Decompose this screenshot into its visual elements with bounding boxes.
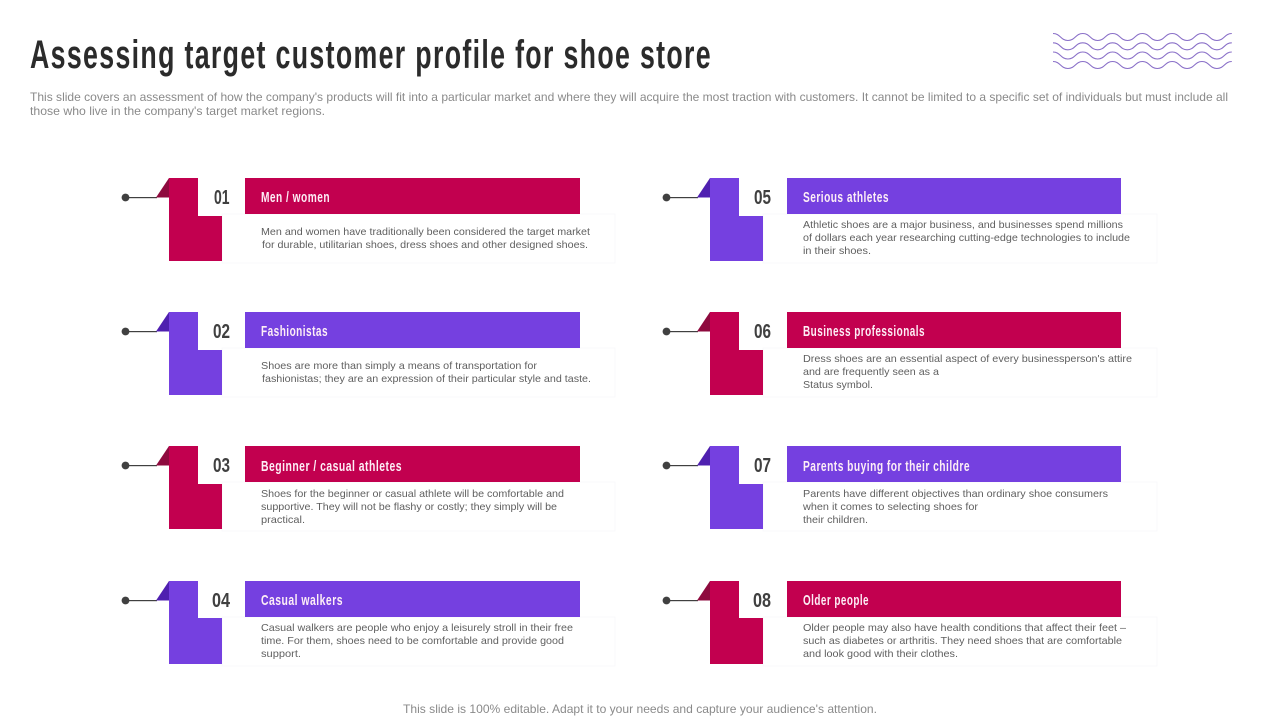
card 07: parents buying for their children: [663, 446, 1157, 531]
card 06: business professionals: [663, 312, 1157, 397]
card 03: beginner / casual athletes: supportive. They will not be flashy or costly; they simply will be: [261, 501, 557, 513]
card 04: casual walkers: Casual walkers: [261, 592, 343, 609]
decorative wave icon: [1053, 34, 1232, 68]
card 01: men / women: Men / women: [261, 189, 330, 206]
card 08: older people: Older people may also have health conditions that affect their feet –: [803, 622, 1126, 634]
title: Assessing target customer profile for shoe store: [30, 33, 712, 77]
card 08: older people: and look good with their clothes.: [803, 648, 958, 660]
card 03: beginner / casual athletes: Beginner / casual athletes: [261, 458, 402, 475]
card 05: serious athletes: in their shoes.: [803, 245, 871, 257]
card 07: parents buying for their children: when it comes to selecting shoes for: [802, 501, 979, 513]
card 02: fashionistas: Shoes are more than simply a means of transportation for: [261, 360, 538, 372]
card 02: fashionistas: [122, 312, 615, 397]
card 05: serious athletes: [663, 178, 1157, 263]
card 02: fashionistas: fashionistas; they are an expression of their particular style and taste.: [262, 373, 591, 385]
card 05: serious athletes: Serious athletes: [803, 189, 889, 206]
card 02: fashionistas: 02: [213, 321, 230, 343]
card 01: men / women: 01: [214, 187, 230, 209]
card 08: older people: such as diabetes or arthritis. They need shoes that are comfortable: [803, 635, 1122, 647]
card 08: older people: Older people: [803, 592, 869, 609]
card 01: men / women: for durable, utilitarian shoes, dress shoes and other designed shoes.: [262, 239, 588, 251]
intro text: This slide covers an assessment of how the company's products will fit into a particular market and where they will acquire the most traction with customers. It cannot be limited to a specific set of individuals but must include all: [30, 90, 1228, 104]
card 06: business professionals: Status symbol.: [803, 379, 873, 391]
card 07: parents buying for their children: 07: [754, 455, 771, 477]
card 01: men / women: [122, 178, 615, 263]
card 06: business professionals: Business professionals: [803, 323, 925, 340]
card 06: business professionals: Dress shoes are an essential aspect of every businessperson's attire: [803, 353, 1132, 365]
card 04: casual walkers: 04: [212, 590, 231, 612]
intro text: those who live in the company's target market regions.: [30, 104, 325, 118]
card 08: older people: [663, 581, 1157, 666]
card 07: parents buying for their children: Parents buying for their childre: [803, 458, 970, 475]
card 03: beginner / casual athletes: practical.: [261, 514, 305, 526]
card 01: men / women: Men and women have traditionally been considered the target market: [261, 226, 590, 238]
card 07: parents buying for their children: Parents have different objectives than ordinary shoe consumers: [803, 488, 1108, 500]
card 04: casual walkers: Casual walkers are people who enjoy a leisurely stroll in their free: [261, 622, 573, 634]
card 07: parents buying for their children: their children.: [803, 514, 868, 526]
card 06: business professionals: and are frequently seen as a: [803, 366, 939, 378]
card 03: beginner / casual athletes: [122, 446, 615, 531]
card 05: serious athletes: Athletic shoes are a major business, and businesses spend millions: [803, 219, 1123, 231]
intro text: [30, 90, 1228, 118]
footer note: This slide is 100% editable. Adapt it to your needs and capture your audience's attention.: [403, 702, 877, 716]
card 06: business professionals: 06: [754, 321, 771, 343]
card 05: serious athletes: 05: [754, 187, 771, 209]
card 04: casual walkers: time. For them, shoes need to be comfortable and provide good: [261, 635, 564, 647]
card 04: casual walkers: support.: [261, 648, 301, 660]
card 03: beginner / casual athletes: 03: [213, 455, 230, 477]
card 03: beginner / casual athletes: Shoes for the beginner or casual athlete will be comfortable and: [261, 488, 564, 500]
card 04: casual walkers: [122, 581, 615, 666]
card 08: older people: 08: [753, 590, 771, 612]
card 02: fashionistas: Fashionistas: [261, 323, 328, 340]
card 05: serious athletes: of dollars each year researching cutting-edge technologies to include: [803, 232, 1130, 244]
